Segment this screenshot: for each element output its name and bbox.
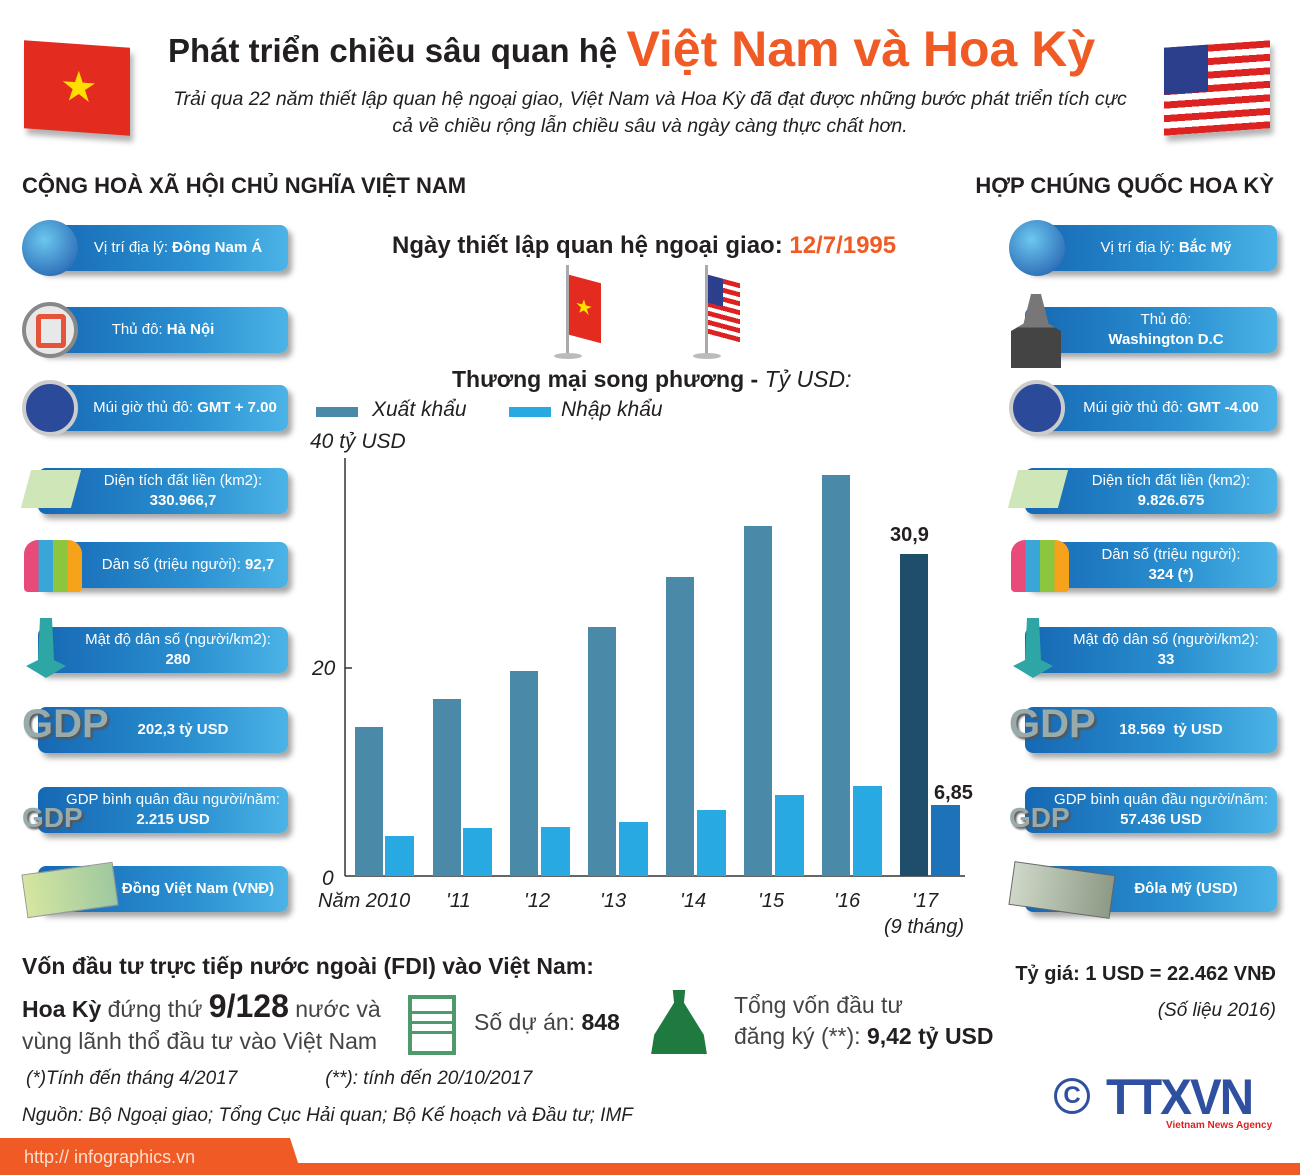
bar chart [310,430,973,938]
icon: GDP: GDP [22,702,109,746]
pill: capital [38,307,288,353]
FDI rank text: vùng lãnh thổ đầu tư vào Việt Nam [22,1028,377,1054]
icon: globe [22,220,78,276]
pill: density: Mật độ dân số (người/km2): [85,631,271,648]
bar chart: '17 [912,890,939,912]
pill: currency: Đồng Việt Nam (VNĐ) [122,880,274,897]
bar chart: 30,9 [890,524,929,546]
icon: Vietnam flag [24,40,130,136]
pill: capital: Washington D.C [1108,331,1224,348]
legend [316,398,663,421]
bar chart: 0 [322,867,334,890]
icon: banknote [21,862,119,918]
icon: dollar bill [1008,861,1116,919]
pill: area: 330.966,7 [150,492,216,509]
pill: density: 280 [165,651,190,668]
icon: Vietnam flag: ★ [60,62,98,111]
icon: globe [1009,220,1065,276]
heading: USA: HỢP CHÚNG QUỐC HOA KỲ [975,173,1274,198]
panel: Vietnam facts [21,220,296,920]
pill: population: 324 (*) [1148,566,1194,583]
pill: location: Vị trí địa lý: Đông Nam Á [94,239,262,256]
pill: GDP: 202,3 tỷ USD [138,721,228,738]
icon: small flags [554,265,740,359]
FDI rank text [22,988,381,1054]
exchange rate: Tỷ giá: 1 USD = 22.462 VNĐ [1015,963,1276,985]
pill: GDP [1025,707,1277,753]
pill: GDP: 18.569 tỷ USD [1119,721,1223,738]
icon: clock [1009,380,1065,436]
bar chart: '14 [680,890,706,912]
projects: Số dự án: 848 [474,1009,620,1035]
pill: density: 33 [1158,651,1174,668]
pill: population [38,542,288,588]
logo: TTXVN: C [1063,1082,1081,1109]
pill: GDP [38,707,288,753]
pill: capital: Thủ đô: Hà Nội [112,321,214,338]
total capital [734,992,994,1049]
pill: population: Dân số (triệu người): [1101,546,1241,563]
icon: clock [22,380,78,436]
pill: GDP per capita: GDP bình quân đầu người/năm: [66,791,280,808]
icon: map [1008,470,1068,508]
pill: currency: Đôla Mỹ (USD) [1134,880,1238,897]
bar chart: '13 [600,890,626,912]
icon: people [24,540,82,592]
icon: US flag [1164,40,1270,136]
pill: area: Diện tích đất liền (km2): [104,472,262,489]
subtitle: Trải qua 22 năm thiết lập quan hệ ngoại giao, Việt Nam và Hoa Kỳ đã đạt được những bước phát triển tích cực [173,88,1127,110]
pill: GDP per capita: GDP bình quân đầu người/năm: [1054,791,1268,808]
footer bar: http:// infographics.vn [24,1147,195,1167]
bar chart: '12 [524,890,550,912]
pill: timezone [38,385,288,431]
heading: Vietnam: CỘNG HOÀ XÃ HỘI CHỦ NGHĨA VIỆT NAM [22,173,466,198]
icon: capitol [1011,294,1061,368]
pill: area [1025,468,1277,514]
bar chart: 20 [311,657,336,680]
subtitle [173,88,1127,137]
pill: capital: Thủ đô: [1141,311,1191,328]
pill: timezone [1025,385,1277,431]
pill: population: Dân số (triệu người): 92,7 [102,556,274,573]
pill: GDP per capita [1025,787,1277,833]
total capital: Tổng vốn đầu tư [734,992,903,1018]
pill: GDP per capita: 57.436 USD [1120,811,1202,828]
icon: Hanoi [22,302,78,358]
pill: location [38,225,288,271]
icon: document [408,995,456,1055]
pill: population [1025,542,1277,588]
pill: location [1025,225,1277,271]
icon: person on map [26,618,66,678]
icon: money bag [648,990,710,1054]
FDI rank text: Hoa Kỳ đứng thứ 9/128 nước và [22,988,381,1024]
bar chart: Năm 2010 [318,890,410,912]
icon: GDP person: GDP [1009,802,1070,833]
icon: map [21,470,81,508]
bar chart: (9 tháng) [884,916,964,938]
pill: currency [1025,866,1277,912]
bar chart: 40 tỷ USD [310,430,406,453]
icon: small flags: ★ [575,294,593,321]
title: Phát triển chiều sâu quan hệ Việt Nam và Hoa Kỳ [168,21,1095,77]
diplomatic date heading: Ngày thiết lập quan hệ ngoại giao: 12/7/1995 [392,232,896,259]
icon: GDP: GDP [1009,702,1096,746]
logo: TTXVN [1054,1069,1272,1131]
icon: person on map [1013,618,1053,678]
bar chart: '15 [758,890,785,912]
bar chart: 6,85 [934,782,973,804]
footer bar [0,1138,1300,1175]
subtitle: cả về chiều rộng lẫn chiều sâu và ngày càng thực chất hơn. [392,115,908,137]
footnotes: (*)Tính đến tháng 4/2017 (**): tính đến 20/10/2017 [26,1068,532,1089]
logo: TTXVN: Vietnam News Agency [1166,1120,1272,1131]
pill: area: Diện tích đất liền (km2): [1092,472,1250,489]
pill: density: Mật độ dân số (người/km2): [1073,631,1259,648]
pill: location: Vị trí địa lý: Bắc Mỹ [1101,239,1231,256]
icon: GDP person: GDP [22,802,83,833]
pill: area: 9.826.675 [1138,492,1204,509]
pill: density [1025,627,1277,673]
source: Nguồn: Bộ Ngoại giao; Tổng Cục Hải quan; Bộ Kế hoạch và Đầu tư; IMF [22,1105,633,1126]
pill: area [38,468,288,514]
data year: (Số liệu 2016) [1158,1000,1276,1021]
pill: GDP per capita [38,787,288,833]
chart title: Thương mại song phương - Tỷ USD: [452,366,851,392]
icon: people [1011,540,1069,592]
legend: Xuất khẩu [372,398,467,421]
legend: Nhập khẩu [561,398,663,421]
logo: TTXVN: TTXVN [1106,1069,1252,1125]
pill: timezone: Múi giờ thủ đô: GMT + 7.00 [93,399,277,416]
panel: USA facts [1008,220,1284,920]
pill: GDP per capita: 2.215 USD [136,811,210,828]
FDI heading: Vốn đầu tư trực tiếp nước ngoài (FDI) vào Việt Nam: [22,953,594,979]
total capital: đăng ký (**): 9,42 tỷ USD [734,1023,994,1049]
pill: capital [1025,307,1277,353]
bar chart: '16 [834,890,861,912]
pill: timezone: Múi giờ thủ đô: GMT -4.00 [1083,399,1259,416]
bar chart: '11 [446,890,471,912]
pill: density [38,627,288,673]
pill: currency [38,866,288,912]
